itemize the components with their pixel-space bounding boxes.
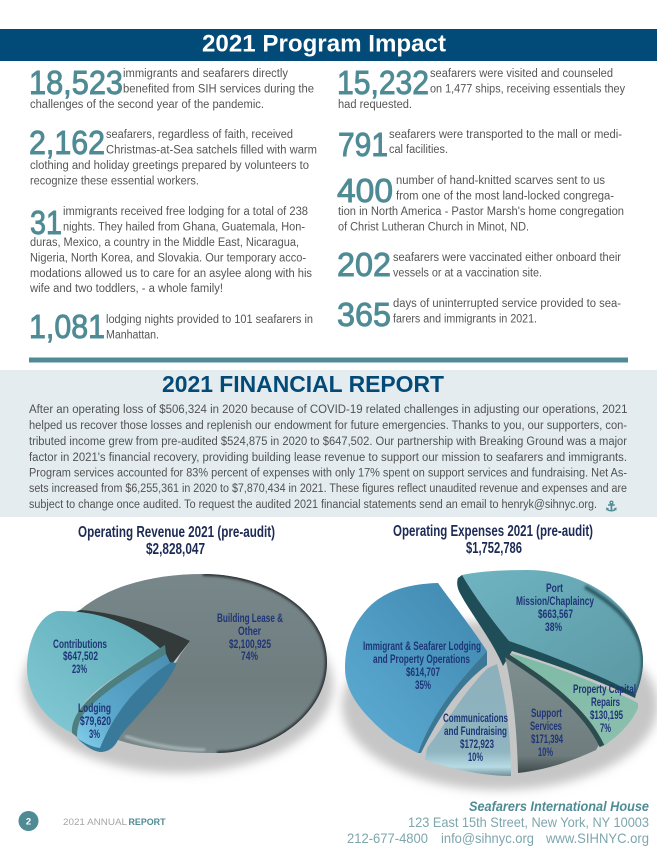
stat: 31 immigrants received lodging: wife and two toddlers, - a whole family! bbox=[29, 283, 223, 295]
label: contributions: $647,502 bbox=[63, 651, 98, 663]
label: port mission: $663,567 bbox=[538, 609, 573, 621]
stat: 31 immigrants received lodging bbox=[29, 204, 312, 295]
label: port mission: Port bbox=[546, 583, 563, 595]
stat: 202 seafarers vaccinated: vessels or at a vaccination site. bbox=[393, 268, 542, 280]
stat: 31 immigrants received lodging: nights. They hailed from Ghana, Guatemala, Hon- bbox=[63, 222, 305, 234]
chart: operating revenue pie bbox=[23, 524, 333, 773]
slice: building lease and other bbox=[80, 574, 327, 753]
stat: 15,232 seafarers visited: had requested. bbox=[338, 99, 412, 111]
stat: 2,162 Christmas-at-Sea satchels: clothing and holiday greetings prepared by volunteers to bbox=[30, 160, 309, 172]
chart: operating expenses pie bbox=[342, 523, 657, 790]
label: building lease: 74% bbox=[241, 651, 258, 663]
label: immigrant and seafarer lodging: and Property Operations bbox=[373, 654, 470, 666]
slice: support services bbox=[505, 655, 602, 773]
stat: 18,523 immigrants and seafarers bbox=[29, 64, 314, 111]
label: property capital repairs: 7% bbox=[600, 723, 611, 735]
stat: 400 hand-knitted scarves: 400 bbox=[337, 172, 393, 209]
stat: 400 hand-knitted scarves: number of hand-knitted scarves sent to us bbox=[396, 175, 605, 187]
stat: 791 seafarers transported: cal facilities. bbox=[389, 144, 448, 156]
footer: annual report label: 2021 ANNUAL bbox=[63, 817, 127, 828]
chart title: revenue bbox=[78, 524, 275, 558]
stat: 31 immigrants received lodging: Nigeria, North Korea, and Slovakia. Our temporary acco- bbox=[30, 252, 306, 264]
stat: 2,162 Christmas-at-Sea satchels: seafarers, regardless of faith, received bbox=[106, 129, 293, 141]
stat: 15,232 seafarers visited: 15,232 bbox=[337, 64, 429, 101]
label: building lease: $2,100,925 bbox=[229, 639, 271, 651]
label: lodging bbox=[78, 703, 111, 741]
stat: 2,162 Christmas-at-Sea satchels: recognize these essential workers. bbox=[30, 176, 199, 188]
stat: 31 immigrants received lodging: duras, Mexico, a country in the Middle East, Nicaragua, bbox=[30, 237, 299, 249]
label: communications and fundraising: Communications bbox=[443, 713, 508, 725]
stat: 791 seafarers transported: seafarers were transported to the mall or medi- bbox=[389, 129, 622, 141]
stat: 365 days of service bbox=[337, 296, 621, 333]
chart title: revenue: $2,828,047 bbox=[146, 541, 205, 558]
label: immigrant and seafarer lodging: $614,707 bbox=[406, 667, 440, 679]
stat: 791 seafarers transported: 791 bbox=[338, 126, 388, 163]
text block: financial summary: sets increased from $6,255,361 in 2020 to $7,870,434 in 2021. These figures reflect unaudited revenue and expenses and are bbox=[29, 483, 627, 495]
footer: annual report label bbox=[63, 817, 166, 828]
label: communications and fundraising: $172,923 bbox=[460, 739, 494, 751]
label: lodging: 3% bbox=[89, 729, 100, 741]
footer: contact details: info@sihnyc.org bbox=[441, 830, 534, 846]
label: property capital repairs bbox=[573, 684, 636, 735]
label: building lease bbox=[217, 613, 283, 663]
stat: 1,081 lodging nights bbox=[29, 308, 313, 345]
label: immigrant and seafarer lodging: 35% bbox=[415, 680, 431, 692]
stat: 15,232 seafarers visited: on 1,477 ships, receiving essentials they bbox=[430, 84, 625, 96]
stat: 400 hand-knitted scarves: of Christ Lutheran Church in Minot, ND. bbox=[338, 222, 529, 234]
stat: 18,523 immigrants and seafarers: 18,523 bbox=[29, 64, 123, 101]
slice: port mission bbox=[457, 570, 643, 698]
heading: financial report: 2021 FINANCIAL REPORT bbox=[162, 371, 444, 397]
text block: financial summary: helped us recover those losses and replenish our endowment for future emergencies. Thanks to you, our supporters, con- bbox=[29, 420, 627, 432]
label: support services: 10% bbox=[538, 747, 553, 759]
label: port mission: Mission/Chaplaincy bbox=[516, 596, 594, 608]
slice: communications and fundraising bbox=[425, 664, 511, 776]
stat: 18,523 immigrants and seafarers: immigrants and seafarers directly bbox=[123, 68, 288, 80]
label: property capital repairs: Repairs bbox=[591, 697, 620, 709]
label: immigrant and seafarer lodging: Immigrant & Seafarer Lodging bbox=[363, 641, 481, 653]
label: property capital repairs: $130,195 bbox=[590, 710, 623, 722]
slice: lodging bbox=[77, 654, 177, 752]
stat: 31 immigrants received lodging: immigrants received free lodging for a total of 238 bbox=[63, 206, 308, 218]
footer: page number badge bbox=[18, 811, 38, 831]
stat: 2,162 Christmas-at-Sea satchels: 2,162 bbox=[29, 124, 105, 161]
stat: 31 immigrants received lodging: 31 bbox=[30, 204, 62, 241]
label: support services: $171,394 bbox=[531, 734, 563, 746]
stat: 2,162 Christmas-at-Sea satchels bbox=[29, 124, 317, 188]
stat: 1,081 lodging nights: 1,081 bbox=[29, 308, 105, 345]
label: communications and fundraising: and Fundraising bbox=[444, 726, 507, 738]
label: contributions bbox=[53, 639, 107, 676]
stat: 15,232 seafarers visited: seafarers were visited and counseled bbox=[430, 68, 613, 80]
stat: 2,162 Christmas-at-Sea satchels: Christmas-at-Sea satchels filled with warm bbox=[106, 144, 317, 156]
stat: 31 immigrants received lodging: modations allowed us to care for an asylee along with his bbox=[30, 268, 312, 280]
text block: financial summary: After an operating loss of $506,324 in 2020 because of COVID-19 related challenges in adjusting our operations, 2021 bbox=[29, 404, 628, 416]
stat: 400 hand-knitted scarves: from one of the most land-locked congrega- bbox=[396, 190, 614, 202]
text block: financial summary: Program services accounted for 83% percent of expenses with only 17% spent on support services and fundraising. Net As- bbox=[29, 468, 627, 480]
footer: contact details bbox=[347, 798, 649, 846]
label: communications and fundraising: 10% bbox=[468, 752, 483, 764]
heading: program impact: 2021 Program Impact bbox=[202, 30, 446, 58]
slice: property capital repairs bbox=[510, 653, 638, 747]
label: contributions: Contributions bbox=[53, 639, 107, 651]
chart title: revenue: Operating Revenue 2021 (pre-audit) bbox=[78, 524, 275, 541]
label: port mission bbox=[516, 583, 594, 634]
stat: 365 days of service: 365 bbox=[337, 296, 391, 333]
label: contributions: 23% bbox=[72, 664, 87, 676]
label: communications and fundraising bbox=[443, 713, 508, 764]
footer: page number badge: 2 bbox=[26, 816, 31, 828]
stat: 1,081 lodging nights: Manhattan. bbox=[106, 330, 159, 342]
stat: 400 hand-knitted scarves: tion in North America - Pastor Marsh's home congregation bbox=[338, 206, 624, 218]
panel: financial report bbox=[0, 370, 657, 517]
label: port mission: 38% bbox=[545, 622, 562, 634]
label: immigrant and seafarer lodging bbox=[363, 641, 481, 692]
label: building lease: Building Lease & bbox=[217, 613, 283, 625]
icon: anchor: ⚓ bbox=[605, 499, 618, 515]
text block: financial summary: subject to change once audited. To request the audited 2021 financial statements send an email to henryk@sihnyc.org. bbox=[29, 499, 597, 511]
slice: contributions bbox=[27, 611, 166, 737]
footer: contact details: 212-677-4800 bbox=[347, 830, 428, 846]
chart title: expenses: $1,752,786 bbox=[466, 540, 522, 557]
footer: contact details: www.SIHNYC.org bbox=[545, 830, 649, 846]
stat: 1,081 lodging nights: lodging nights provided to 101 seafarers in bbox=[106, 314, 313, 326]
stat: 15,232 seafarers visited bbox=[337, 64, 625, 111]
footer: annual report label: REPORT bbox=[128, 817, 166, 828]
stat: 400 hand-knitted scarves bbox=[337, 172, 624, 234]
slice: immigrant and seafarer lodging bbox=[345, 583, 487, 753]
stat: 202 seafarers vaccinated: 202 bbox=[337, 246, 391, 283]
stat: 18,523 immigrants and seafarers: challenges of the second year of the pandemic. bbox=[30, 99, 264, 111]
stat: 365 days of service: farers and immigrants in 2021. bbox=[393, 314, 537, 326]
chart title: expenses: Operating Expenses 2021 (pre-audit) bbox=[393, 523, 593, 540]
label: building lease: Other bbox=[238, 626, 261, 638]
stat: 202 seafarers vaccinated bbox=[337, 246, 621, 283]
label: support services: Services bbox=[530, 721, 562, 733]
chart title: expenses bbox=[393, 523, 593, 557]
text block: financial summary bbox=[29, 404, 628, 511]
stat: 202 seafarers vaccinated: seafarers were vaccinated either onboard their bbox=[393, 252, 621, 264]
label: support services: Support bbox=[531, 708, 562, 720]
stat: 18,523 immigrants and seafarers: benefited from SIH services during the bbox=[123, 84, 314, 96]
text block: financial summary: tributed income grew from pre-audited $524,875 in 2020 to $647,502. Our partnership with Breaking Ground was a major bbox=[29, 436, 627, 448]
text block: financial summary: factor in 2021's financial recovery, providing building lease revenue to support our mission to seafarers and immigrants. bbox=[29, 452, 627, 464]
label: lodging: Lodging bbox=[78, 703, 111, 715]
banner: 2021 Program Impact bbox=[0, 29, 657, 61]
label: support services bbox=[530, 708, 563, 759]
stat: 791 seafarers transported bbox=[338, 126, 622, 163]
stat: 365 days of service: days of uninterrupted service provided to sea- bbox=[393, 298, 621, 310]
label: lodging: $79,620 bbox=[80, 716, 111, 728]
